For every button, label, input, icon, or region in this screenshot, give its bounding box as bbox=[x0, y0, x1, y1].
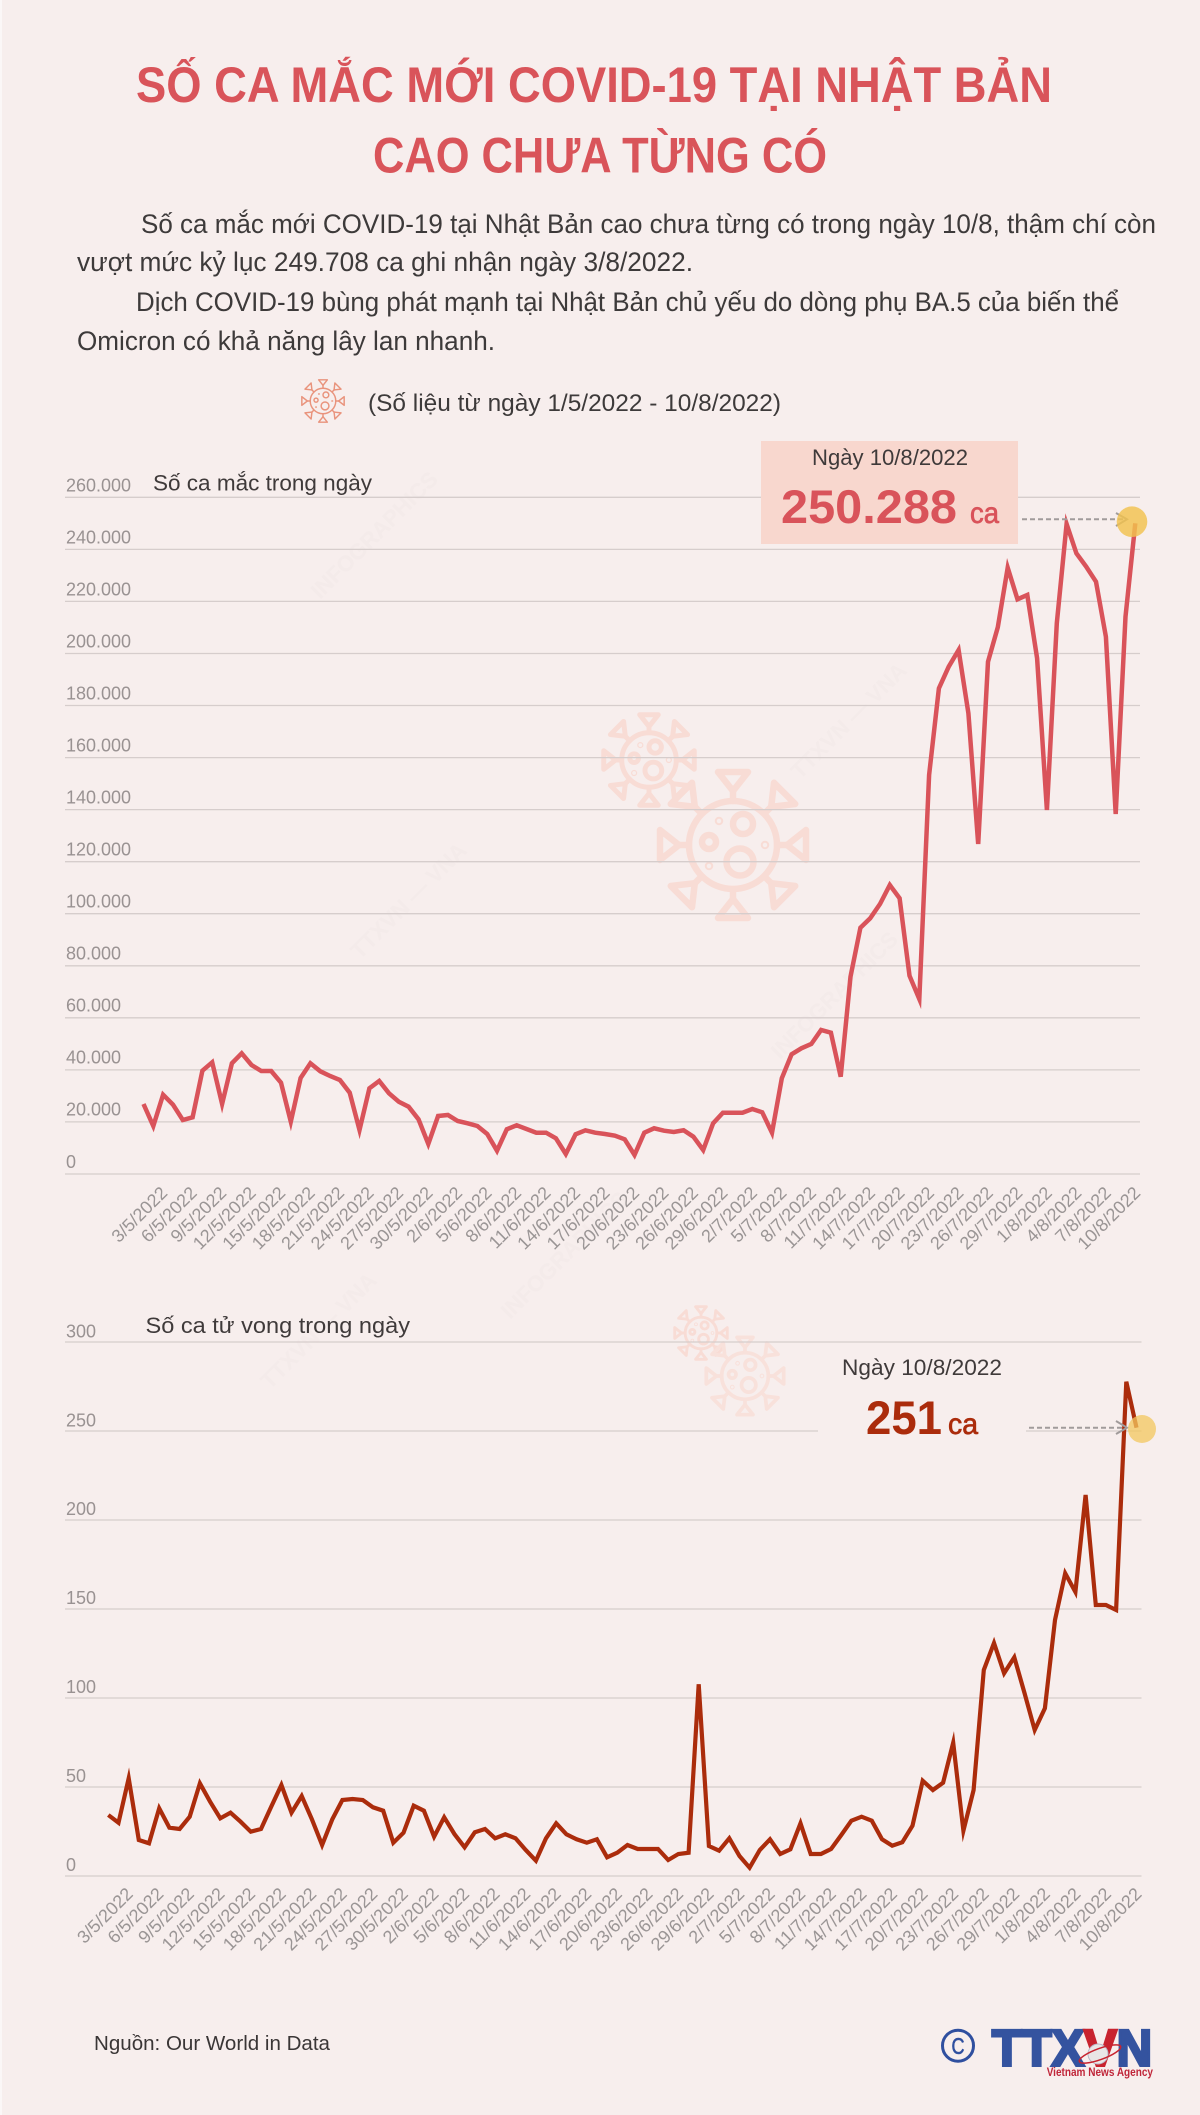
watermark bbox=[256, 467, 912, 1394]
x axis labels: 24/5/2022 bbox=[280, 1884, 351, 1954]
x axis labels: 20/7/2022 bbox=[867, 1183, 938, 1253]
y axis labels: 220.000 bbox=[66, 580, 131, 600]
x axis labels bbox=[108, 1183, 1144, 1253]
title: SỐ CA MẮC MỚI COVID-19 TẠI NHẬT BẢN bbox=[136, 56, 1052, 113]
y axis labels: 260.000 bbox=[66, 476, 131, 496]
y axis labels: 180.000 bbox=[66, 684, 131, 704]
x axis labels: 26/6/2022 bbox=[616, 1884, 687, 1954]
intro text: Số ca mắc mới COVID-19 tại Nhật Bản cao chưa từng có trong ngày 10/8, thậm chí còn bbox=[141, 208, 1156, 239]
y axis labels: 300 bbox=[66, 1322, 96, 1342]
intro text: Omicron có khả năng lây lan nhanh. bbox=[77, 326, 495, 356]
x axis labels: 20/6/2022 bbox=[572, 1183, 643, 1253]
icon: virus bbox=[302, 380, 344, 422]
x axis labels: 23/6/2022 bbox=[586, 1884, 657, 1954]
x axis labels: 14/6/2022 bbox=[494, 1884, 565, 1954]
x axis labels: 20/7/2022 bbox=[861, 1884, 932, 1954]
x axis labels: 8/7/2022 bbox=[756, 1183, 820, 1246]
arrow to latest value bbox=[1029, 1421, 1127, 1434]
watermark: INFOGRAPHICS bbox=[496, 1187, 633, 1324]
x axis labels: 4/8/2022 bbox=[1022, 1183, 1085, 1246]
x axis labels: 2/7/2022 bbox=[697, 1183, 761, 1246]
copyright symbol bbox=[942, 2030, 974, 2061]
watermark: INFOGRAPHICS bbox=[766, 927, 903, 1064]
callout: 10/8/2022 new cases bbox=[761, 441, 1018, 544]
x axis labels: 1/8/2022 bbox=[990, 1884, 1054, 1947]
x axis labels: 10/8/2022 bbox=[1075, 1884, 1146, 1954]
copyright symbol: C bbox=[952, 2033, 964, 2059]
x axis labels: 11/7/2022 bbox=[770, 1884, 840, 1954]
watermark: TTXVN — VNA bbox=[346, 838, 472, 964]
watermark: INFOGRAPHICS bbox=[306, 467, 443, 604]
x axis labels: 5/7/2022 bbox=[715, 1884, 779, 1947]
x axis labels: 17/6/2022 bbox=[525, 1884, 595, 1954]
y axis labels: 0 bbox=[66, 1855, 76, 1875]
watermark: TTXVN — VNA bbox=[256, 1268, 382, 1394]
x axis labels: 7/8/2022 bbox=[1051, 1884, 1115, 1947]
x axis labels: 23/7/2022 bbox=[891, 1884, 962, 1954]
chart heading: Số ca tử vong trong ngày bbox=[146, 1313, 410, 1338]
x axis labels: 21/5/2022 bbox=[277, 1183, 348, 1253]
x axis labels: 5/7/2022 bbox=[727, 1183, 791, 1246]
x axis labels: 6/5/2022 bbox=[137, 1183, 201, 1246]
y axis labels: 120.000 bbox=[66, 840, 131, 860]
callout: 10/8/2022 new cases: 250.288 bbox=[781, 480, 957, 533]
intro text: Dịch COVID-19 bùng phát mạnh tại Nhật Bản chủ yếu do dòng phụ BA.5 của biến thể bbox=[136, 287, 1119, 317]
logo: TTXVN: TTXVN bbox=[992, 2020, 1152, 2076]
x axis labels: 18/5/2022 bbox=[219, 1884, 290, 1954]
x axis labels: 23/6/2022 bbox=[602, 1183, 673, 1253]
x axis labels: 29/7/2022 bbox=[956, 1183, 1026, 1253]
x axis labels: 17/6/2022 bbox=[543, 1183, 614, 1253]
highlight dot bbox=[1117, 506, 1147, 537]
y axis labels: 100.000 bbox=[66, 892, 131, 912]
x axis labels: 4/8/2022 bbox=[1021, 1884, 1085, 1947]
virus watermark large bbox=[660, 772, 806, 918]
intro text: vượt mức kỷ lục 249.708 ca ghi nhận ngày 3/8/2022. bbox=[77, 247, 693, 277]
y axis labels: 240.000 bbox=[66, 528, 131, 548]
x axis labels: 3/5/2022 bbox=[73, 1884, 137, 1947]
y axis labels: 150 bbox=[66, 1588, 96, 1608]
x axis labels: 26/7/2022 bbox=[922, 1884, 993, 1954]
arrow to latest value bbox=[1022, 513, 1127, 526]
x axis labels: 23/7/2022 bbox=[897, 1183, 967, 1253]
y axis labels: 250 bbox=[66, 1410, 96, 1430]
y axis labels: 50 bbox=[66, 1766, 86, 1786]
callout: 10/8/2022 deaths: ca bbox=[948, 1408, 978, 1441]
x axis labels: 10/8/2022 bbox=[1074, 1183, 1144, 1253]
highlight dot bbox=[1128, 1415, 1156, 1443]
y axis labels: 40.000 bbox=[66, 1048, 121, 1068]
x axis labels: 1/8/2022 bbox=[992, 1183, 1056, 1246]
x axis labels: 5/6/2022 bbox=[432, 1183, 496, 1246]
x axis labels: 30/5/2022 bbox=[341, 1884, 412, 1954]
date range note: (Số liệu từ ngày 1/5/2022 - 10/8/2022) bbox=[368, 390, 781, 417]
x axis labels: 14/7/2022 bbox=[808, 1183, 879, 1253]
x axis labels: 27/5/2022 bbox=[311, 1884, 381, 1954]
x axis labels: 8/6/2022 bbox=[440, 1884, 504, 1947]
x axis labels: 9/5/2022 bbox=[134, 1884, 198, 1947]
y axis labels: 20.000 bbox=[66, 1100, 121, 1120]
gridlines bbox=[65, 1342, 1142, 1876]
source note: Nguồn: Our World in Data bbox=[94, 2033, 331, 2055]
x axis labels: 8/7/2022 bbox=[746, 1884, 809, 1947]
data line: new cases bbox=[144, 523, 1135, 1155]
x axis labels: 9/5/2022 bbox=[167, 1183, 230, 1246]
virus watermark large bbox=[706, 1337, 784, 1415]
y axis labels: 140.000 bbox=[66, 788, 131, 808]
x axis labels: 15/5/2022 bbox=[188, 1884, 259, 1954]
y axis labels: 200 bbox=[66, 1499, 96, 1519]
intro text bbox=[77, 208, 1156, 356]
gridlines bbox=[65, 497, 1140, 1174]
x axis labels: 11/6/2022 bbox=[464, 1884, 534, 1954]
x axis labels: 11/7/2022 bbox=[780, 1183, 850, 1253]
x axis labels: 8/6/2022 bbox=[461, 1183, 525, 1246]
chart 1: new cases per day bbox=[65, 441, 1147, 1253]
x axis labels: 24/5/2022 bbox=[307, 1183, 378, 1253]
virus watermark small bbox=[675, 1307, 727, 1359]
x axis labels: 21/5/2022 bbox=[249, 1884, 320, 1954]
x axis labels: 11/6/2022 bbox=[485, 1183, 555, 1253]
title: CAO CHƯA TỪNG CÓ bbox=[373, 128, 827, 184]
x axis labels: 27/5/2022 bbox=[336, 1183, 407, 1253]
y axis labels: 60.000 bbox=[66, 996, 121, 1016]
chart 2: deaths per day bbox=[65, 1307, 1156, 1954]
y axis labels: 100 bbox=[66, 1677, 96, 1697]
callout: 10/8/2022 deaths bbox=[842, 1355, 1002, 1444]
virus watermark small bbox=[604, 715, 694, 805]
x axis labels: 15/5/2022 bbox=[218, 1183, 289, 1253]
x axis labels: 3/5/2022 bbox=[108, 1183, 171, 1246]
x axis labels: 12/5/2022 bbox=[189, 1183, 260, 1253]
x axis labels: 14/7/2022 bbox=[800, 1884, 871, 1954]
x axis labels: 29/7/2022 bbox=[953, 1884, 1023, 1954]
x axis labels: 2/6/2022 bbox=[402, 1183, 466, 1246]
data line: deaths bbox=[108, 1382, 1136, 1868]
x axis labels: 5/6/2022 bbox=[409, 1884, 473, 1947]
x axis labels: 6/5/2022 bbox=[104, 1884, 167, 1947]
y axis labels bbox=[66, 1322, 96, 1875]
x axis labels: 17/7/2022 bbox=[830, 1884, 901, 1954]
x axis labels: 2/6/2022 bbox=[379, 1884, 443, 1947]
x axis labels: 29/6/2022 bbox=[661, 1183, 732, 1253]
x axis labels: 2/7/2022 bbox=[685, 1884, 748, 1947]
y axis labels: 160.000 bbox=[66, 736, 131, 756]
x axis labels: 17/7/2022 bbox=[838, 1183, 909, 1253]
x axis labels bbox=[73, 1884, 1146, 1954]
y axis labels: 0 bbox=[66, 1152, 76, 1172]
x axis labels: 26/7/2022 bbox=[926, 1183, 997, 1253]
y axis labels: 80.000 bbox=[66, 944, 121, 964]
logo: TTXVN: Vietnam News Agency bbox=[1047, 2067, 1154, 2079]
x axis labels: 30/5/2022 bbox=[366, 1183, 437, 1253]
y axis labels bbox=[66, 476, 131, 1172]
title bbox=[136, 56, 1052, 184]
x axis labels: 7/8/2022 bbox=[1051, 1183, 1115, 1246]
chart heading: Số ca mắc trong ngày bbox=[153, 470, 372, 496]
callout: 10/8/2022 deaths: Ngày 10/8/2022 bbox=[842, 1355, 1002, 1380]
x axis labels: 29/6/2022 bbox=[647, 1884, 718, 1954]
x axis labels: 26/6/2022 bbox=[631, 1183, 702, 1253]
y axis labels: 200.000 bbox=[66, 632, 131, 652]
x axis labels: 14/6/2022 bbox=[513, 1183, 584, 1253]
callout: 10/8/2022 deaths: 251 bbox=[866, 1391, 942, 1444]
watermark: TTXVN — VNA bbox=[786, 658, 912, 784]
x axis labels: 20/6/2022 bbox=[555, 1884, 626, 1954]
callout: 10/8/2022 new cases: ca bbox=[970, 497, 999, 530]
callout: 10/8/2022 new cases: Ngày 10/8/2022 bbox=[812, 445, 968, 470]
x axis labels: 12/5/2022 bbox=[158, 1884, 229, 1954]
x axis labels: 18/5/2022 bbox=[248, 1183, 319, 1253]
